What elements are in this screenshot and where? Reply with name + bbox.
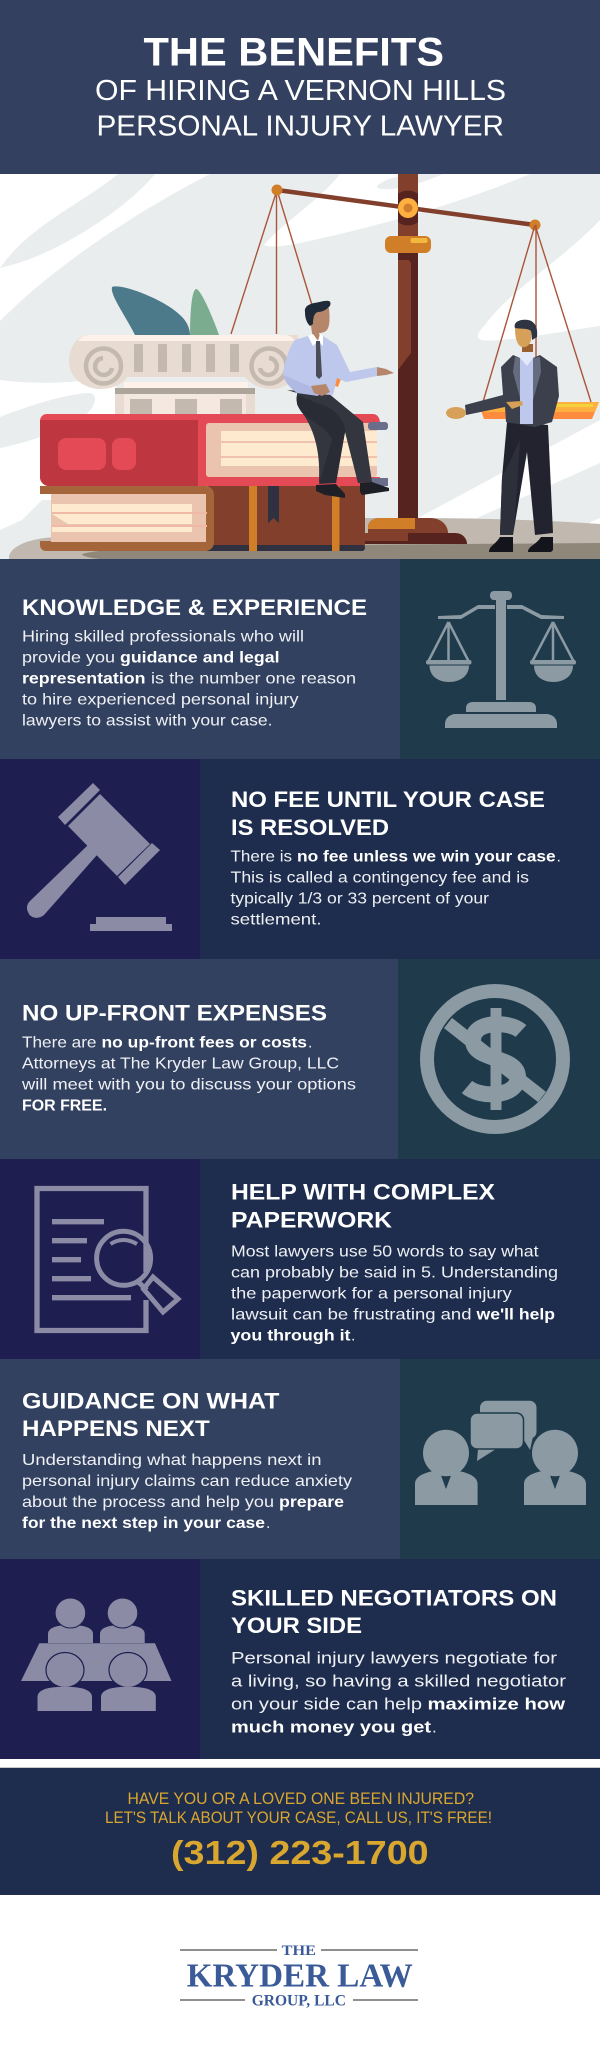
text block xyxy=(22,629,356,730)
call to action text: LET'S TALK ABOUT YOUR CASE, CALL US, IT'S FREE! xyxy=(105,1809,492,1827)
panel: header xyxy=(0,0,600,174)
icon: negotiating table xyxy=(21,1598,172,1711)
panel: complex paperwork xyxy=(0,1159,600,1359)
text block: . xyxy=(556,849,561,866)
text block: lawsuit can be frustrating and xyxy=(231,1307,472,1324)
logo: The Kryder Law Group: KRYDER LAW xyxy=(187,1958,413,1995)
icon: two people talking xyxy=(415,1401,586,1505)
text block: about the process and help you xyxy=(22,1494,274,1511)
text block xyxy=(21,1035,356,1115)
call to action text xyxy=(105,1790,492,1827)
text block xyxy=(231,1649,566,1737)
panel: no up-front expenses xyxy=(0,959,600,1159)
text block: settlement. xyxy=(230,912,322,929)
right scale pan and strings xyxy=(478,225,599,419)
logo: The Kryder Law Group: THE xyxy=(282,1943,316,1959)
icon: document with magnifier xyxy=(37,1188,178,1330)
panel: guidance on what happens next xyxy=(0,1359,600,1559)
text block: FOR FREE. xyxy=(22,1098,107,1115)
brown book xyxy=(40,486,365,551)
text block: Most lawyers use 50 words to say what xyxy=(231,1244,539,1261)
heading xyxy=(231,1586,557,1638)
plant leaves xyxy=(112,286,219,335)
heading: NO FEE UNTIL YOUR CASE xyxy=(231,787,545,812)
heading: HAPPENS NEXT xyxy=(22,1416,210,1441)
heading: NO UP-FRONT EXPENSES xyxy=(22,1001,327,1026)
text block: on your side can help xyxy=(231,1695,422,1714)
text block: no fee unless we win your case xyxy=(297,849,556,866)
text block xyxy=(22,1452,352,1532)
text block: personal injury claims can reduce anxiety xyxy=(22,1473,352,1490)
text block: is the number one reason xyxy=(151,671,356,688)
illustration: lawyers with scale, books and column xyxy=(0,174,600,559)
person: standing lawyer xyxy=(446,320,559,552)
text block: we'll help xyxy=(475,1307,555,1324)
text block: There is xyxy=(230,849,292,866)
panel: skilled negotiators xyxy=(0,1559,600,1759)
text block: a living, so having a skilled negotiator xyxy=(231,1672,566,1691)
text block: representation xyxy=(22,671,146,688)
heading: IS RESOLVED xyxy=(231,815,389,840)
text block: lawyers to assist with your case. xyxy=(22,713,272,730)
text block: you through it xyxy=(230,1328,351,1345)
text block: . xyxy=(432,1718,437,1737)
icon: crossed-out dollar xyxy=(427,991,563,1127)
text block: provide you xyxy=(22,650,115,667)
books xyxy=(40,414,388,551)
text block: There are xyxy=(22,1035,97,1052)
title: OF HIRING A VERNON HILLS xyxy=(95,75,506,107)
heading: YOUR SIDE xyxy=(231,1613,362,1638)
icon: scales of justice xyxy=(426,591,576,728)
text block: for the next step in your case xyxy=(22,1515,265,1532)
text block: maximize how xyxy=(428,1695,566,1714)
title xyxy=(95,30,506,142)
panel: call to action xyxy=(0,1767,600,1895)
heading: KNOWLEDGE & EXPERIENCE xyxy=(22,595,367,620)
scale pole xyxy=(272,174,540,544)
heading xyxy=(231,1180,495,1233)
column capital xyxy=(69,335,298,416)
text block: . xyxy=(351,1328,355,1345)
logo: The Kryder Law Group xyxy=(180,1943,418,2010)
text block xyxy=(230,1244,558,1345)
icon: gavel xyxy=(27,783,172,931)
red book xyxy=(40,414,388,486)
text block: prepare xyxy=(279,1494,344,1511)
text block: This is called a contingency fee and is xyxy=(230,870,529,887)
title: THE BENEFITS xyxy=(144,30,444,74)
heading: SKILLED NEGOTIATORS ON xyxy=(231,1586,557,1611)
text block: much money you get xyxy=(231,1718,431,1737)
heading: PAPERWORK xyxy=(231,1208,392,1233)
logo: The Kryder Law Group: GROUP, LLC xyxy=(252,1993,346,2010)
text block xyxy=(230,849,561,929)
text block: will meet with you to discuss your options xyxy=(21,1077,356,1094)
call to action text: HAVE YOU OR A LOVED ONE BEEN INJURED? xyxy=(128,1790,474,1808)
text block: Understanding what happens next in xyxy=(22,1452,322,1469)
text block: to hire experienced personal injury xyxy=(22,692,298,709)
text block: can probably be said in 5. Understanding xyxy=(231,1265,558,1282)
text block: . xyxy=(308,1035,312,1052)
person: seated lawyer xyxy=(283,301,394,498)
text block: Personal injury lawyers negotiate for xyxy=(231,1649,557,1668)
title: PERSONAL INJURY LAWYER xyxy=(96,110,504,142)
text block: the paperwork for a personal injury xyxy=(231,1286,512,1303)
phone number: (312) 223-1700 xyxy=(171,1835,429,1872)
text block: Attorneys at The Kryder Law Group, LLC xyxy=(22,1056,339,1073)
scale strings left xyxy=(231,190,312,334)
heading: HELP WITH COMPLEX xyxy=(231,1180,495,1205)
text block: typically 1/3 or 33 percent of your xyxy=(230,891,490,908)
text block: no up-front fees or costs xyxy=(102,1035,307,1052)
text block: . xyxy=(266,1515,270,1532)
panel: no fee until resolved xyxy=(0,759,600,959)
heading xyxy=(231,787,545,840)
text block: Hiring skilled professionals who will xyxy=(22,629,304,646)
text block: guidance and legal xyxy=(120,650,280,667)
panel: knowledge and experience xyxy=(0,559,600,759)
ground xyxy=(9,518,600,559)
heading: GUIDANCE ON WHAT xyxy=(22,1389,280,1414)
heading xyxy=(22,1389,280,1441)
